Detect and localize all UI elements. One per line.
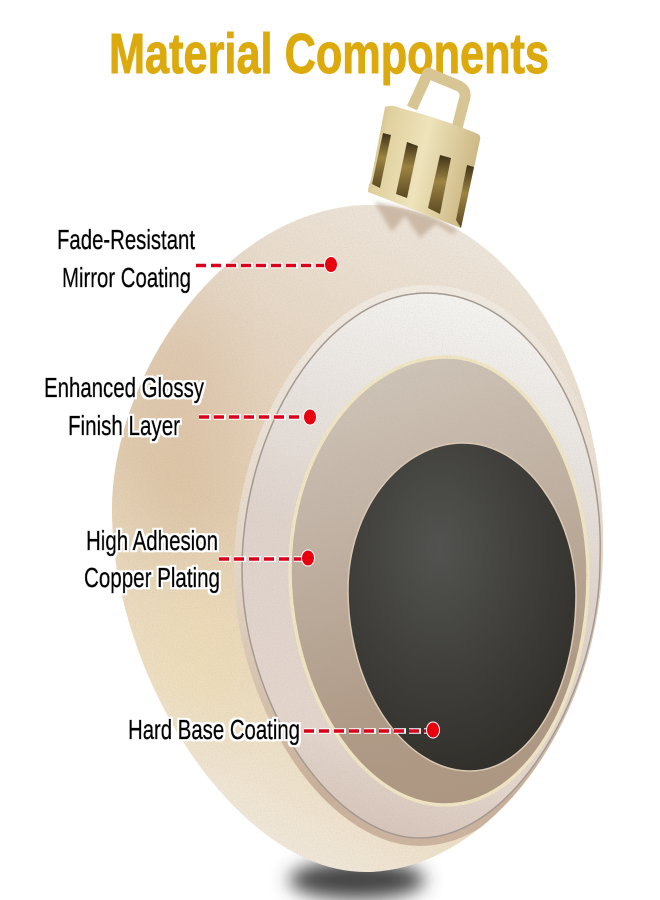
shell shading: [130, 308, 235, 700]
label text: Copper Plating: [84, 562, 220, 593]
label text: Mirror Coating: [62, 262, 191, 293]
icon: gold cap: [368, 73, 480, 238]
label text: Hard Base Coating: [128, 714, 300, 745]
cap body: [368, 106, 480, 228]
marker dot: [324, 256, 338, 272]
dark base coating: [348, 443, 576, 771]
cap loop: [412, 73, 465, 128]
marker dot: [302, 550, 314, 566]
marker dot: [426, 722, 440, 738]
label: fade-resistant mirror coating: [57, 224, 338, 293]
outer ring collar: [242, 293, 600, 838]
ball outer shell: [112, 205, 603, 872]
ornament ball: [100, 200, 610, 880]
cap stain: [374, 202, 458, 238]
marker dot: [304, 409, 316, 425]
label: high adhesion copper plating: [84, 525, 314, 593]
label text: [44, 372, 204, 441]
surface grain: [100, 200, 610, 880]
label: hard base coating: [128, 714, 440, 745]
label text: Fade-Resistant: [57, 224, 195, 255]
label text: Enhanced Glossy: [44, 372, 204, 403]
copper ring: [290, 357, 588, 805]
icon: ornament shadow: [289, 861, 425, 899]
label text: Finish Layer: [68, 410, 180, 441]
cap slots: [372, 133, 474, 228]
label text: [57, 224, 195, 293]
silver ring: [242, 293, 600, 838]
label text: [84, 525, 220, 593]
label text: High Adhesion: [86, 525, 218, 556]
label: enhanced glossy finish layer: [44, 372, 316, 441]
